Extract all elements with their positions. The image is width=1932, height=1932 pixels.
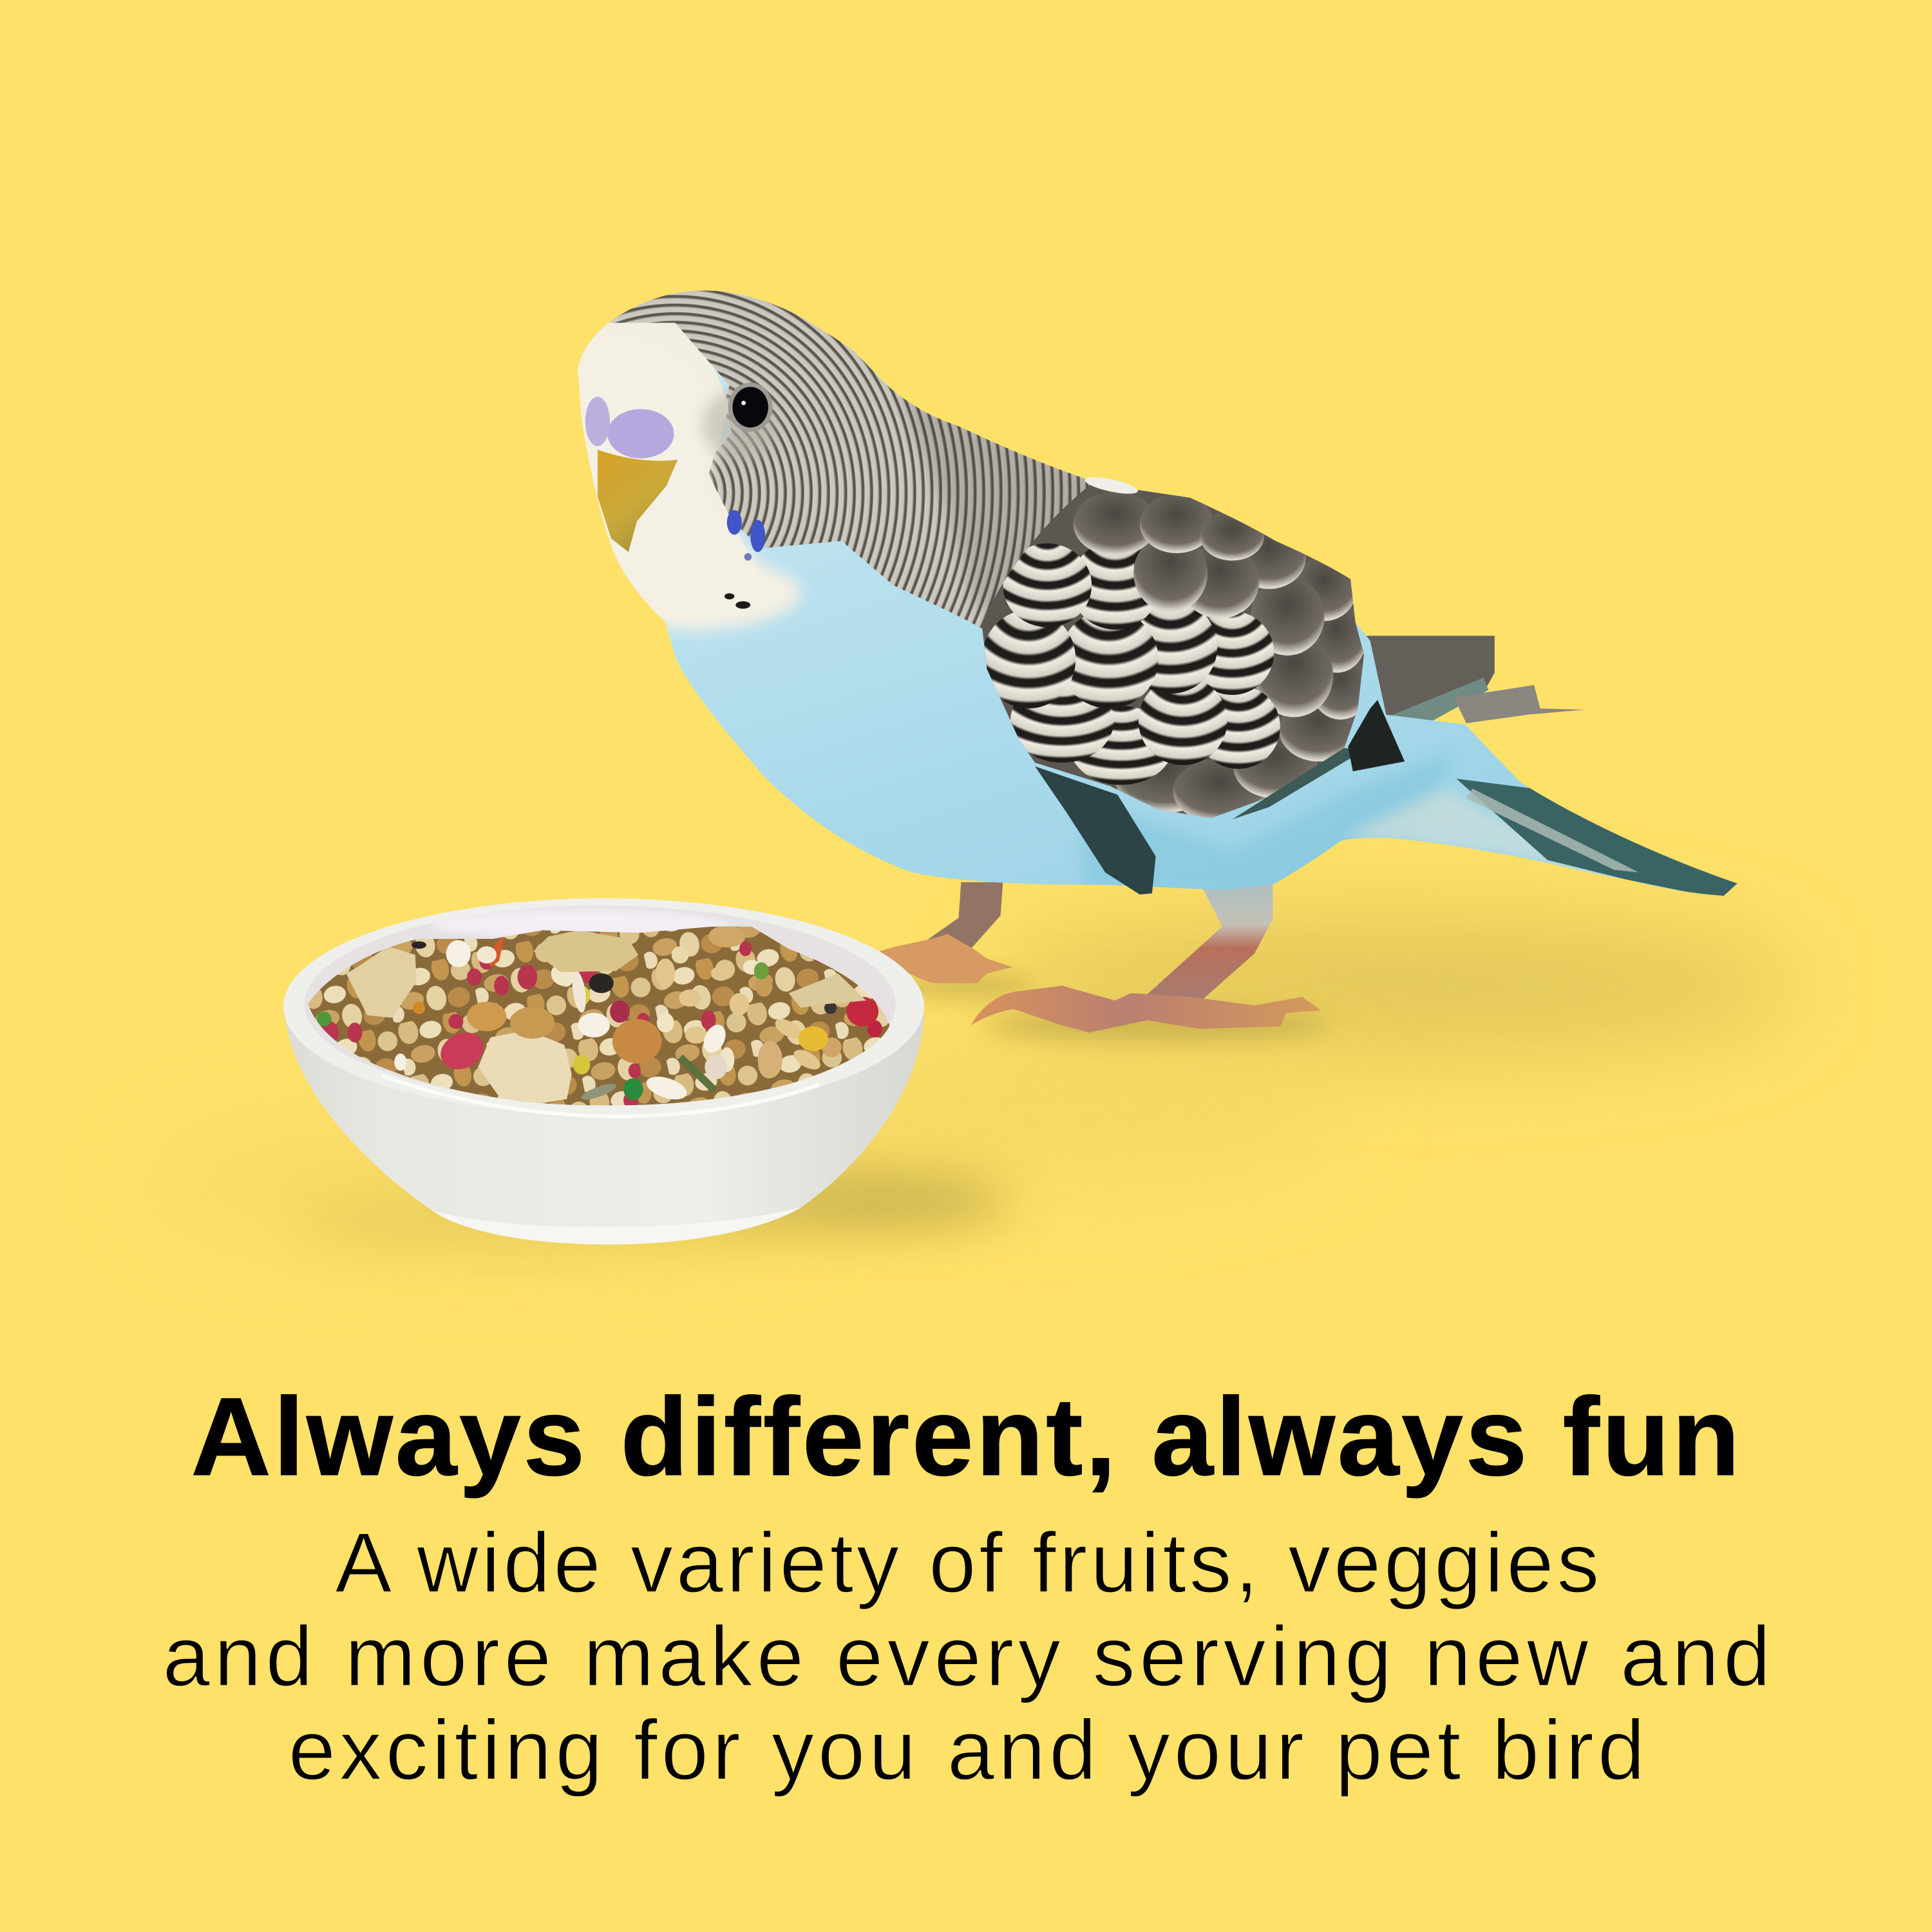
- near leg: [971, 884, 1321, 1032]
- tail lower feathers: [1456, 779, 1750, 900]
- ground shadows: [148, 914, 1799, 1247]
- description text: exciting for you and your pet bird: [289, 1702, 1645, 1797]
- bowl body: [285, 1013, 924, 1244]
- inner wall: [305, 905, 896, 1103]
- cere: [585, 397, 674, 459]
- wing: [973, 475, 1370, 826]
- red pellets: [314, 942, 882, 1109]
- budgerigar: [542, 247, 1750, 1032]
- outer brown feathers: [1115, 525, 1370, 823]
- far leg: [880, 882, 1013, 983]
- wing base: [973, 475, 1368, 826]
- golden cluster: [510, 1007, 554, 1039]
- pale tail underside: [1343, 788, 1627, 880]
- description text: and more make every serving new and: [163, 1608, 1770, 1703]
- beak: [598, 450, 677, 552]
- description text: [163, 1515, 1770, 1797]
- body: [578, 290, 1738, 896]
- inner wall highlight: [431, 911, 727, 938]
- bowl foot shading: [431, 1208, 801, 1244]
- eye surround: [703, 391, 776, 460]
- orange and yellow pieces: [413, 933, 828, 1074]
- pale biscuit chunks: [346, 946, 417, 1018]
- wing lower teal edge: [1232, 748, 1361, 819]
- rim front highlight: [382, 1075, 819, 1116]
- tail base markings: [1348, 700, 1405, 772]
- food mix: [296, 918, 900, 1115]
- cheek blue spots: [727, 510, 765, 561]
- large red pellets: [435, 997, 878, 1076]
- wing flight tip: [1035, 766, 1156, 895]
- eye: [728, 383, 773, 432]
- neck and back barring: [604, 290, 1168, 629]
- infographic canvas: [167, 290, 1784, 1797]
- white face and throat: [567, 333, 801, 630]
- heading: Always different, always fun: [191, 1375, 1740, 1499]
- pale face base: [567, 323, 761, 622]
- food bowl: [283, 898, 924, 1244]
- white slivers: [394, 940, 730, 1104]
- shoulder white patch: [1084, 474, 1139, 497]
- barred feathers: [982, 541, 1280, 785]
- bowl rim: [283, 898, 924, 1115]
- upper covert feathers: [1073, 491, 1264, 618]
- green and dark pieces: [317, 942, 837, 1103]
- food base: [296, 918, 900, 1115]
- plumage within body outline: [542, 247, 1750, 900]
- belly shading: [1084, 752, 1454, 900]
- golden grains right side: [656, 946, 842, 1078]
- throat spots: [724, 593, 750, 609]
- description text: A wide variety of fruits, veggies: [335, 1515, 1599, 1610]
- tail upper feathers: [1343, 636, 1584, 737]
- darker back tone: [901, 400, 1090, 613]
